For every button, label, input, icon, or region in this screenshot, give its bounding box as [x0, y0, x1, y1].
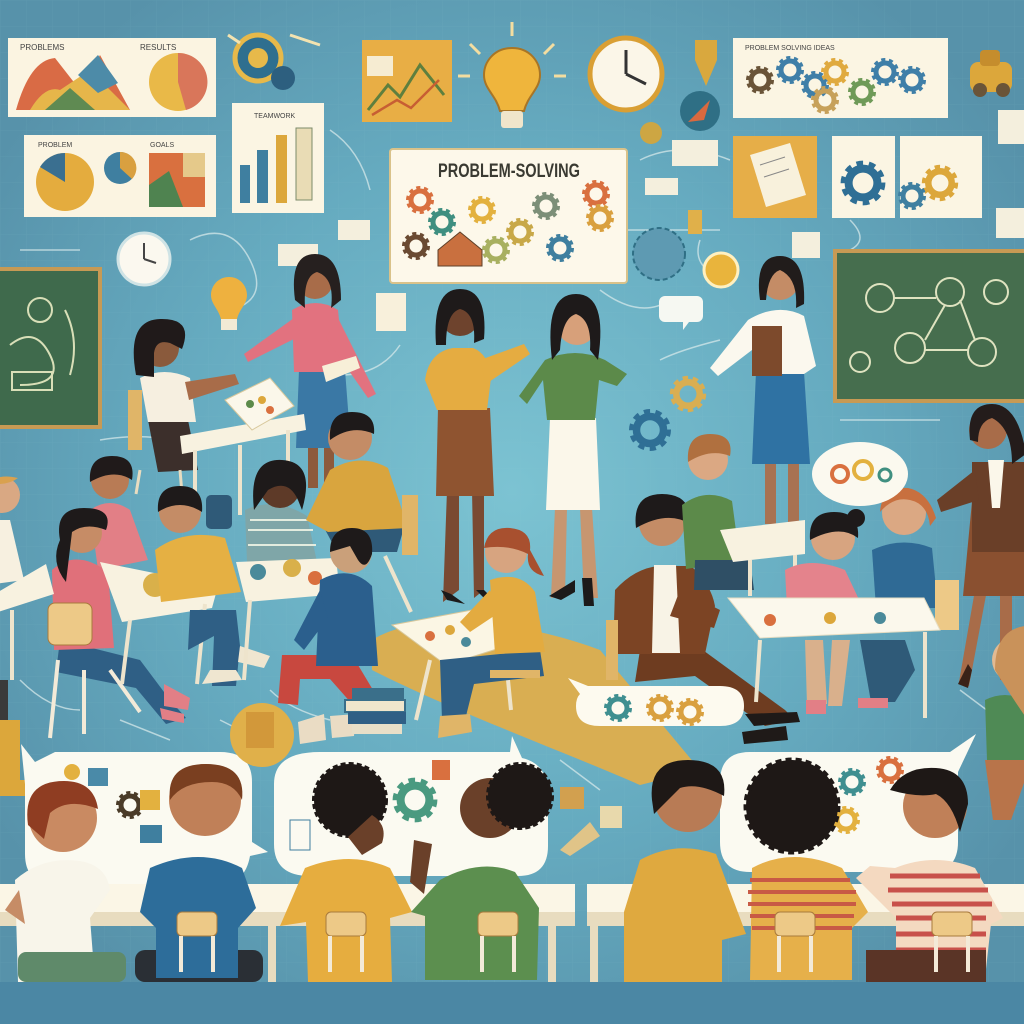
chair girl	[48, 603, 140, 738]
table top right	[720, 520, 805, 596]
girl in striped sweater	[245, 460, 317, 562]
table right	[728, 598, 940, 718]
boy left edge	[0, 680, 36, 796]
speech bubble bottom centre	[274, 736, 548, 876]
teacher in yellow	[425, 289, 530, 604]
icon: gear medallion	[228, 35, 320, 90]
floor path	[372, 622, 700, 785]
yellow note circle	[230, 703, 294, 767]
teacher in pink	[244, 254, 376, 488]
speech bubble center	[568, 678, 744, 726]
chalkboard right	[835, 251, 1024, 401]
card: orange document	[733, 136, 817, 218]
boy in blue sweater from behind	[278, 528, 382, 744]
icon: light bulb	[458, 22, 566, 128]
shoes right	[806, 698, 888, 714]
small side notes	[278, 110, 1024, 266]
doodle lines	[20, 130, 1000, 790]
card: mountain and pie charts	[8, 38, 216, 117]
speech bubble bottom left	[21, 744, 268, 884]
teacher in green	[519, 294, 627, 606]
table with puzzle centre	[392, 607, 516, 720]
chalkboard left	[0, 269, 100, 427]
boy yellow sweater	[306, 412, 418, 612]
card: orange trend chart	[362, 40, 452, 122]
boy in pink	[90, 456, 148, 570]
card: mountain and pie charts: RESULTS	[140, 43, 176, 52]
icon: brain network	[633, 228, 685, 280]
gear icon blue	[632, 412, 668, 448]
girl in yellow	[438, 528, 545, 738]
student afro striped	[746, 760, 868, 980]
kid far left	[0, 476, 24, 584]
icon: thought bulb	[211, 277, 247, 330]
teacher in brown jacket	[937, 404, 1024, 688]
bottom band	[0, 982, 1024, 1024]
notes centre	[560, 787, 622, 856]
icon: wall clock	[590, 38, 662, 110]
student yellow shirt	[280, 764, 412, 982]
card: gears panel	[733, 38, 948, 118]
seated girl white top	[128, 319, 239, 529]
boy in blue right	[860, 488, 959, 702]
student white shirt	[5, 781, 126, 982]
icon: compass	[640, 91, 720, 144]
main title card	[390, 149, 627, 283]
icon: clock	[118, 233, 170, 285]
card: bar chart	[232, 103, 324, 213]
boy in yellow	[155, 486, 270, 686]
boy in green	[682, 434, 754, 590]
card: gears panel: PROBLEM SOLVING IDEAS	[745, 45, 835, 52]
student red striped	[856, 768, 1003, 982]
icon: yellow robot	[970, 50, 1012, 97]
gold gear	[672, 378, 704, 410]
stack of books	[345, 688, 406, 734]
student green shirt	[410, 764, 552, 980]
card: pie charts: GOALS	[150, 142, 174, 149]
card: gear poster	[832, 136, 895, 218]
chairs bottom	[177, 912, 972, 972]
speech bubble bottom right	[720, 734, 976, 872]
table with puzzle left	[180, 378, 306, 515]
speech bubble small	[659, 296, 703, 330]
card: pie charts	[24, 135, 216, 217]
girl in pink sweater	[785, 509, 865, 706]
card: bar chart: TEAMWORK	[254, 113, 296, 120]
card: pie charts: PROBLEM	[38, 142, 72, 149]
speech bubble top right kids	[812, 442, 908, 506]
table middle	[236, 558, 340, 680]
table left 2	[100, 562, 218, 684]
card: mountain and pie charts: PROBLEMS	[20, 43, 64, 52]
poster note small	[376, 293, 406, 331]
title: PROBLEM-SOLVING	[438, 161, 580, 182]
icon: pin	[695, 40, 717, 86]
desks bottom right	[587, 884, 1024, 982]
girl right edge	[985, 626, 1024, 820]
girl in pink with jeans	[52, 508, 190, 724]
table left 1	[0, 564, 54, 680]
card: golden gear poster	[900, 136, 982, 218]
student yellow sweater	[624, 760, 746, 982]
boy in brown jacket	[606, 494, 800, 744]
icon: sun bulb	[688, 210, 738, 287]
teacher in white blouse	[710, 256, 816, 524]
desks bottom left	[0, 884, 575, 982]
student blue shirt	[135, 764, 263, 982]
